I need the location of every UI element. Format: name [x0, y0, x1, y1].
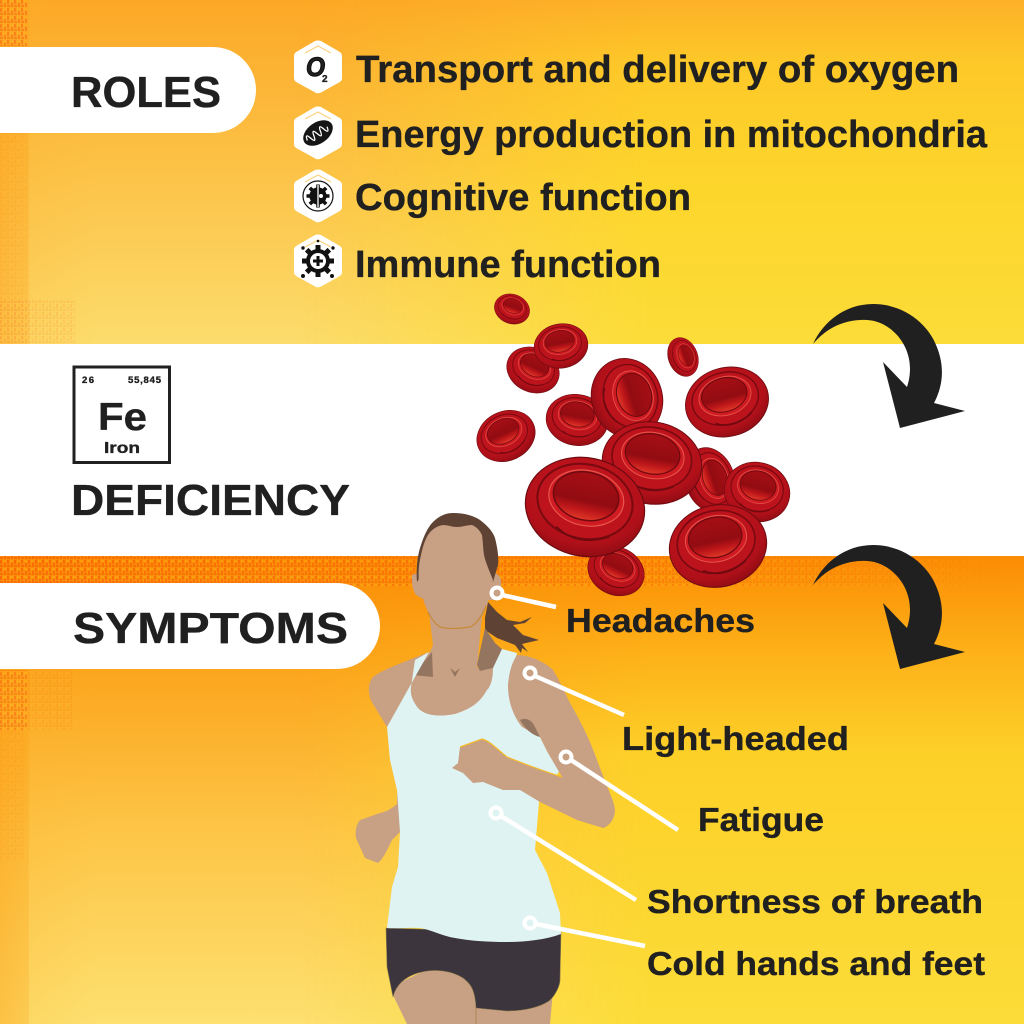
cell	[468, 401, 544, 471]
icon: iron periodic table tile: 26	[82, 375, 94, 386]
callout: headaches	[492, 588, 755, 639]
cell	[678, 358, 776, 446]
ponytail	[485, 602, 539, 653]
background: white deficiency band	[0, 344, 1024, 556]
cell	[596, 414, 708, 512]
forearm rim	[460, 739, 562, 777]
callout: shortness of breath	[490, 808, 983, 920]
cell	[662, 333, 704, 381]
cell	[717, 455, 797, 529]
callout: headaches: Headaches	[566, 602, 755, 639]
background: top band	[0, 0, 1024, 344]
cell	[676, 441, 744, 519]
roles list	[355, 49, 988, 286]
back arm and fist	[356, 652, 429, 863]
callout: fatigue	[560, 752, 824, 838]
icon: iron periodic table tile: 55,845	[128, 375, 162, 386]
hair	[417, 513, 498, 582]
underarm shadow	[520, 719, 540, 737]
callout: cold hands and feet	[524, 918, 985, 982]
jaw line	[428, 606, 486, 628]
callout: fatigue: Fatigue	[698, 801, 824, 838]
collar mark	[450, 668, 460, 677]
icon: immune function hexagon	[294, 234, 342, 288]
callout: light-headed: Light-headed	[622, 720, 849, 757]
cell	[580, 537, 652, 605]
callout: light-headed	[524, 668, 849, 757]
icon: cognitive function hexagon	[294, 170, 342, 223]
icon: iron periodic table tile	[74, 367, 170, 462]
callout: cold hands and feet: Cold hands and feet	[647, 945, 985, 982]
shorts	[386, 928, 561, 1011]
cell	[542, 390, 612, 450]
label pill: symptoms: SYMPTOMS	[73, 604, 348, 653]
roles list: Energy production in mitochondria	[355, 114, 988, 156]
roles list: Cognitive function	[355, 177, 691, 219]
ears	[412, 572, 501, 600]
icon: oxygen hexagon	[294, 40, 342, 94]
background: bottom band	[0, 556, 1024, 1024]
cell	[516, 446, 654, 568]
cell	[531, 320, 591, 372]
neck shadows	[413, 628, 503, 677]
icon: mitochondrion hexagon	[294, 106, 342, 160]
icon: oxygen hexagon: 2	[322, 74, 328, 85]
heading: deficiency: DEFICIENCY	[71, 476, 350, 525]
roles list: Immune function	[355, 244, 661, 286]
arrow: roles to deficiency	[813, 304, 965, 428]
neck and chest	[408, 605, 500, 722]
icon: iron periodic table tile: Fe	[98, 396, 147, 439]
icon: iron periodic table tile: Iron	[104, 440, 140, 457]
tank top	[387, 649, 561, 942]
illustration: running woman	[356, 513, 615, 1024]
cell	[490, 289, 534, 329]
cell	[499, 339, 567, 401]
label pill: roles	[0, 47, 256, 133]
label pill: symptoms	[0, 583, 380, 669]
label pill: roles: ROLES	[71, 68, 221, 117]
arrow: deficiency to symptoms	[813, 545, 965, 669]
red blood cells	[468, 289, 797, 605]
face	[419, 525, 493, 629]
cell	[662, 496, 774, 596]
icon: oxygen hexagon: O	[306, 52, 325, 82]
roles list: Transport and delivery of oxygen	[356, 49, 959, 91]
callout: shortness of breath: Shortness of breath	[647, 883, 983, 920]
cell	[581, 349, 673, 447]
leg divide	[475, 990, 477, 1024]
front arm	[452, 655, 615, 828]
legs	[393, 968, 553, 1024]
